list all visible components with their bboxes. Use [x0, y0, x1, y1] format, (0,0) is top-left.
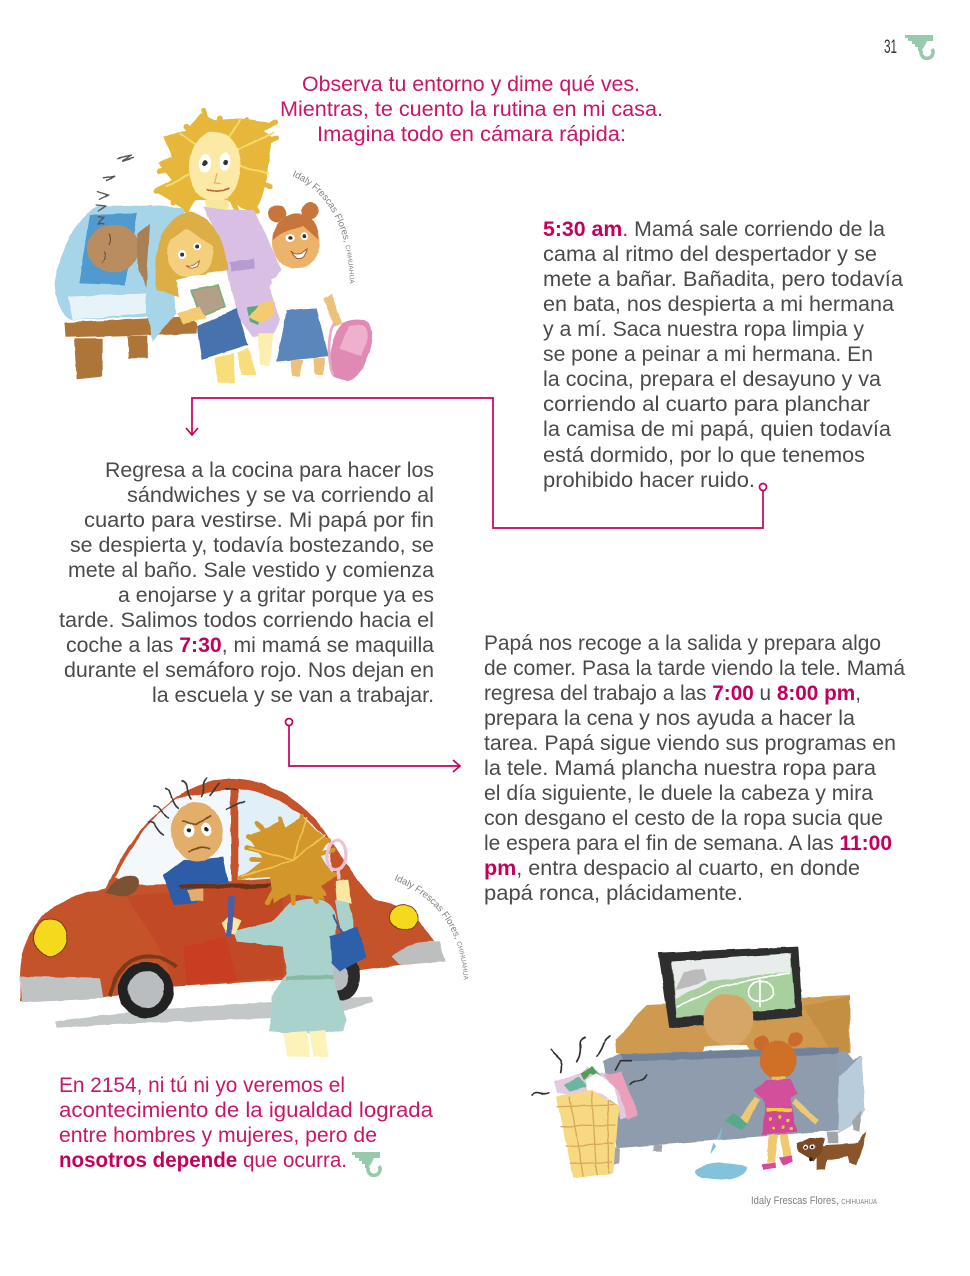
right text block: 5:30 am: está dormido, por lo que tenemos — [543, 444, 865, 467]
page number: 31 — [884, 37, 897, 58]
right text block: 5:30 am — [543, 218, 903, 492]
left text block: durante el semáforo rojo. Nos dejan en — [64, 659, 434, 682]
right text block: 5:30 am: y a mí. Saca nuestra ropa limpia y — [543, 318, 864, 341]
left text block: sándwiches y se va corriendo al — [127, 484, 434, 507]
illustration credit 2: Idaly Frescas Flores, CHIHUAHUA — [394, 874, 468, 980]
right text block: afternoon: papá ronca, plácidamente. — [484, 882, 743, 905]
driver — [163, 802, 273, 905]
illustration credit 3: Idaly Frescas Flores, CHIHUAHUA — [751, 1195, 877, 1207]
right text block: 5:30 am: la cocina, prepara el desayuno y va — [543, 368, 881, 391]
left text block — [59, 459, 434, 707]
blanket and pillow — [55, 205, 152, 320]
arrow: connector from left text to afternoon text — [286, 718, 460, 772]
right text block: 5:30 am: en bata, nos despierta a mi hermana — [543, 293, 894, 316]
younger sister — [268, 202, 342, 377]
sleeping father — [87, 206, 185, 342]
left text block: tarde. Salimos todos corriendo hacia el — [59, 609, 434, 632]
closing message: entre hombres y mujeres, pero de — [59, 1124, 377, 1147]
right text block: 5:30 am: se pone a peinar a mi hermana. En — [543, 343, 873, 366]
intro heading: Observa tu entorno y dime qué ves. — [302, 73, 640, 96]
dog — [797, 1132, 867, 1170]
glass and spilled water — [695, 1113, 748, 1180]
illustration: living room scene — [532, 947, 867, 1180]
right text block: afternoon: el día siguiente, le duele la cabeza y mira — [484, 782, 873, 805]
anger strands — [148, 778, 245, 835]
closing message: nosotros depende que ocurra. — [59, 1149, 347, 1172]
car body — [19, 778, 445, 1018]
backpack — [328, 320, 373, 382]
illustration: morning bedroom family — [55, 110, 373, 383]
closing message: acontecimiento de la igualdad lograda — [59, 1099, 433, 1122]
right text block: 5:30 am: 5:30 am. Mamá sale corriendo de la — [543, 218, 885, 241]
right text block: 5:30 am: mete a bañar. Bañadita, pero todavía — [543, 268, 903, 291]
illustration: car scene — [19, 778, 445, 1057]
right text block: afternoon: Papá nos recoge a la salida y prepara algo — [484, 632, 881, 655]
girl — [737, 1032, 818, 1169]
left text block: se despierta y, todavía bostezando, se — [70, 534, 434, 557]
illustration credit 1: Idaly Frescas Flores, CHIHUAHUA — [292, 170, 354, 284]
right text block: afternoon: prepara la cena y nos ayuda a hacer la — [484, 707, 855, 730]
icon: green ornament end — [352, 1152, 380, 1175]
right text block: 5:30 am: prohibido hacer ruido. — [543, 469, 755, 492]
right text block: afternoon: la tele. Mamá plancha nuestra ropa para — [484, 757, 876, 780]
right text block: 5:30 am: corriendo al cuarto para planchar — [543, 393, 870, 416]
sofa — [603, 1047, 865, 1165]
left text block: a enojarse y a gritar porque ya es — [118, 584, 434, 607]
right text block: afternoon: pm, entra despacio al cuarto, en donde — [484, 857, 860, 880]
left text block: coche a las 7:30, mi mamá se maquilla — [66, 634, 434, 657]
right text block: afternoon: de comer. Pasa la tarde viendo la tele. Mamá — [484, 657, 905, 680]
right text block: 5:30 am: cama al ritmo del despertador y se — [543, 243, 877, 266]
bed frame — [64, 316, 197, 379]
closing message — [59, 1074, 433, 1172]
zzz — [97, 155, 133, 224]
sideboard — [616, 995, 850, 1053]
right text block: afternoon: regresa del trabajo a las 7:00 u 8:00 pm, — [484, 682, 861, 705]
right text block: afternoon: tarea. Papá sigue viendo sus programas en — [484, 732, 896, 755]
closing message: En 2154, ni tú ni yo veremos el — [59, 1074, 345, 1097]
icon: green ornament top — [905, 35, 933, 58]
basket — [556, 1090, 618, 1178]
left text block: mete al baño. Sale vestido y comienza — [68, 559, 434, 582]
smell lines — [532, 1035, 647, 1095]
left text block: cuarto para vestirse. Mi papá por fin — [84, 509, 434, 532]
right text block: 5:30 am: la camisa de mi papá, quien todavía — [543, 418, 891, 441]
laundry — [553, 1067, 638, 1120]
intro heading: Mientras, te cuento la rutina en mi casa. — [280, 98, 663, 121]
left text block: la escuela y se van a trabajar. — [152, 684, 434, 707]
television — [658, 947, 803, 1028]
handbag — [330, 915, 367, 972]
arrow: connector from morning text to next text — [186, 398, 766, 528]
intro heading — [280, 73, 663, 146]
mother — [155, 110, 282, 367]
older sister — [155, 212, 275, 383]
road shadow — [55, 997, 373, 1028]
father head — [703, 994, 753, 1052]
mother with comb and mirror — [222, 817, 353, 1057]
right text block: afternoon — [484, 632, 905, 905]
right text block: afternoon: con desgano el cesto de la ropa sucia que — [484, 807, 883, 830]
right text block: afternoon: le espera para el fin de semana. A las 11:00 — [484, 832, 892, 855]
left text block: Regresa a la cocina para hacer los — [105, 459, 434, 482]
intro heading: Imagina todo en cámara rápida: — [317, 123, 626, 146]
